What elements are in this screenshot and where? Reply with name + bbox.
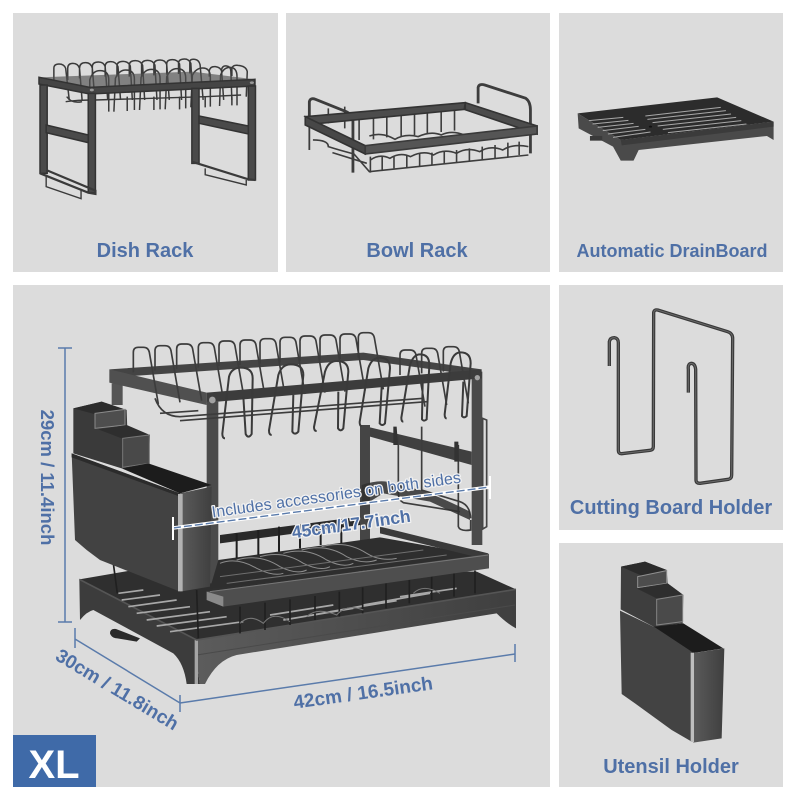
top frame: [109, 353, 482, 583]
illustration: assembled rack: [72, 333, 516, 684]
dimension: width: [180, 644, 515, 714]
label: dish rack: Dish Rack: [97, 240, 194, 262]
panel: utensil holder: [559, 543, 783, 787]
front plate wires: [222, 352, 471, 438]
panel: drainboard: [559, 13, 783, 272]
badge: XL: [13, 735, 96, 787]
panel: cutting board holder: [559, 285, 783, 530]
label: drainboard: Automatic DrainBoard: [576, 241, 768, 261]
drain handle: [110, 629, 140, 642]
dimension: accessories span: [173, 470, 490, 542]
icon: cutting board holder: [609, 310, 733, 483]
lower basket: [207, 517, 489, 607]
dimension: accessories span: Includes accessories on both sides: [211, 470, 462, 521]
badge: XL: XL: [28, 743, 80, 787]
dimension: depth: 30cm / 11.8inch: [52, 645, 182, 735]
back legs and rails: [112, 372, 487, 545]
frame: [305, 103, 537, 134]
frame top: [39, 72, 255, 87]
dimension: height: [37, 348, 72, 622]
icon: utensil holder: [620, 562, 724, 743]
icon: drainboard: [578, 97, 774, 161]
tray slats: [118, 588, 457, 632]
dimension: height: 29cm / 11.4inch: [37, 410, 58, 545]
icon: dish rack: [39, 59, 255, 199]
panel: bowl rack: [286, 13, 550, 272]
label: cutting board holder: Cutting Board Holder: [570, 497, 772, 519]
icon: bowl rack: [305, 85, 537, 173]
panel: assembled rack: [13, 285, 550, 787]
label: bowl rack: Bowl Rack: [366, 240, 468, 262]
dimension: width: 42cm / 16.5inch: [292, 673, 434, 714]
label: utensil holder: Utensil Holder: [603, 756, 739, 778]
back plate wires: [133, 333, 468, 421]
panel: dish rack: [13, 13, 278, 272]
utensil holder: [72, 402, 212, 592]
tray: [79, 563, 516, 684]
dimension: accessories span: 45cm/17.7inch: [291, 506, 412, 542]
